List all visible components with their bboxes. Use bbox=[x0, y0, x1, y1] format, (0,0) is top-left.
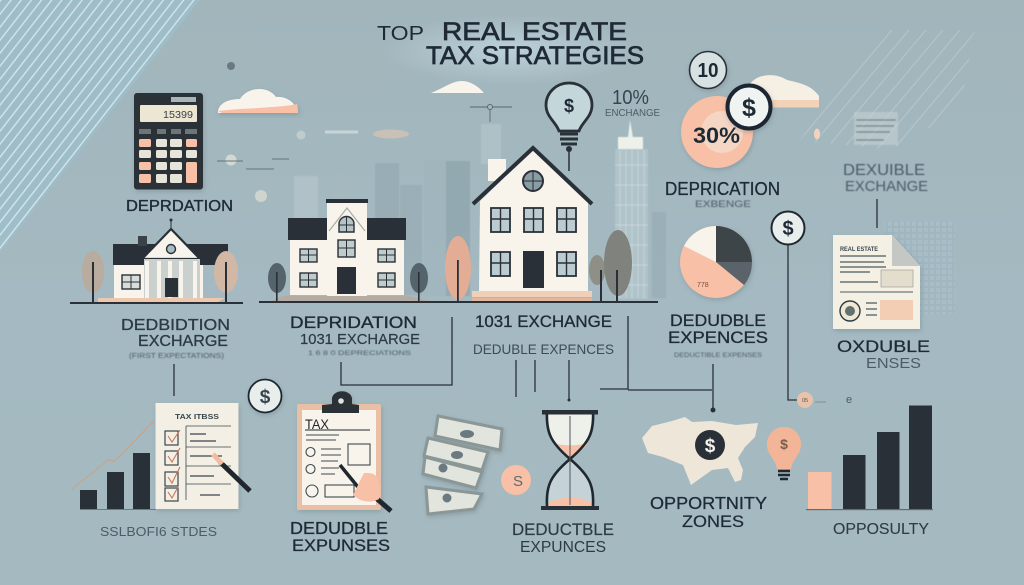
label: deductble expunces bbox=[512, 520, 614, 556]
label: dedudble expences: DEDUDBLE bbox=[670, 312, 766, 330]
label: dedudble expences: DEDUCTIBLE EXPENSES bbox=[674, 352, 763, 359]
icon: 10 coin bbox=[690, 52, 726, 88]
icon: dollar coin with post bbox=[772, 212, 804, 400]
map: $ bbox=[705, 436, 716, 457]
label: opposulty: OPPOSULTY bbox=[833, 521, 929, 538]
skyscraper bbox=[615, 120, 648, 299]
grid texture bbox=[885, 222, 955, 314]
peach dollar coin: S bbox=[513, 473, 523, 490]
bar chart with trend bbox=[72, 421, 156, 510]
icon: hourglass bbox=[541, 410, 599, 510]
label: 10% exchange: 10% bbox=[612, 87, 649, 109]
label: deductble expunces: DEDUCTBLE bbox=[512, 520, 614, 539]
icon: 30% circle: 30% bbox=[693, 123, 740, 148]
label: deductble expunces: EXPUNCES bbox=[520, 539, 606, 556]
ground line 2 bbox=[259, 301, 658, 303]
label: deprication bbox=[665, 179, 780, 210]
faded small document bbox=[854, 112, 898, 145]
label: dedudble expences bbox=[668, 312, 768, 359]
label: dedudble expenses: EXPUNSES bbox=[292, 536, 390, 555]
label: oxdubable expenses bbox=[837, 337, 930, 372]
title: TAX STRATEGIES bbox=[426, 42, 644, 70]
label: dexuible exchange: DEXUIBLE bbox=[843, 162, 925, 179]
bar chart bbox=[806, 406, 933, 510]
label: depridation 1031 exchange: DEPRIDATION bbox=[290, 314, 417, 332]
clipboard bbox=[297, 391, 381, 510]
icon: peach lightbulb: $ bbox=[780, 436, 788, 452]
building 1 bbox=[82, 218, 238, 302]
map bbox=[642, 417, 758, 485]
label: dedudble expenses: DEDUDBLE bbox=[290, 518, 388, 538]
icon: dollar coin: $ bbox=[260, 387, 271, 408]
icon: dollar coin with post: $ bbox=[782, 218, 794, 240]
small peach coin: 05 bbox=[802, 398, 808, 404]
pie chart bbox=[680, 226, 752, 298]
label: depridation 1031 exchange: 1 6 8 0 DEPRECIATIONS bbox=[308, 350, 412, 357]
title: TOP bbox=[377, 23, 424, 45]
small peach coin: e bbox=[846, 394, 852, 406]
label: deprication: EXBENGE bbox=[695, 199, 751, 210]
label: dexuible exchange bbox=[843, 162, 928, 195]
label: dedudble expences: EXPENCES bbox=[668, 329, 768, 347]
title: REAL ESTATE bbox=[442, 18, 627, 46]
label: sslbdfi6 stdes: SSLBOFI6 STDES bbox=[100, 524, 217, 539]
icon: calculator: 15399 bbox=[163, 110, 193, 121]
label: 10% exchange bbox=[605, 87, 660, 119]
cloud left bbox=[218, 89, 298, 113]
icon: hand with pen bbox=[340, 465, 391, 511]
document: real estate: REAL ESTATE bbox=[840, 246, 879, 253]
icon: dollar coin bbox=[728, 86, 770, 128]
main house bbox=[472, 148, 592, 297]
icon: 10 coin: 10 bbox=[698, 60, 718, 82]
title bbox=[377, 18, 644, 70]
small drop bbox=[814, 128, 820, 140]
checklist document: TAX ITBSS bbox=[175, 412, 219, 421]
icon: 30% circle bbox=[681, 96, 753, 168]
document: real estate bbox=[833, 235, 920, 329]
label: dedbidtion exchange: EXCHARGE bbox=[138, 333, 228, 350]
cloud centre bbox=[431, 81, 484, 93]
peach dollar coin bbox=[501, 465, 531, 495]
icon: pen bbox=[213, 454, 250, 491]
cloud right bbox=[750, 75, 819, 108]
label: deprication: DEPRICATION bbox=[665, 179, 780, 199]
clipboard: TAX bbox=[305, 416, 330, 432]
label: oxdubable expenses: ENSES bbox=[866, 356, 921, 372]
label: 1031 exchange: 1031 EXCHANGE bbox=[475, 312, 612, 331]
icon: dollar coin bbox=[248, 380, 282, 412]
icon: dollar coin: $ bbox=[742, 94, 756, 122]
label: dedudble expenses bbox=[290, 518, 390, 555]
icon: lightbulb: $ bbox=[564, 96, 574, 116]
checklist document bbox=[156, 403, 238, 509]
city skyline background bbox=[294, 124, 666, 298]
label: oxdubable expenses: OXDUBLE bbox=[837, 337, 930, 356]
icon: money stacks bbox=[423, 416, 502, 514]
label: deduble expences: DEDUBLE EXPENCES bbox=[473, 341, 614, 357]
label: dedbidtion exchange bbox=[121, 317, 230, 360]
label: dexuible exchange: EXCHANGE bbox=[845, 178, 928, 195]
small peach coin bbox=[797, 392, 852, 408]
building 2 bbox=[268, 199, 430, 302]
label: opportunity zones: OPPORTNITY bbox=[650, 493, 767, 513]
arrow bbox=[876, 199, 878, 228]
label: 10% exchange: ENCHANGE bbox=[605, 107, 660, 119]
label: dedbidtion exchange: (FIRST EXPECTATIONS) bbox=[129, 351, 225, 360]
ground line 1 bbox=[70, 302, 243, 304]
label: opportunity zones: ZONES bbox=[682, 513, 744, 531]
label: depridation 1031 exchange: 1031 EXCHARGE bbox=[300, 331, 420, 348]
trees beside main house bbox=[445, 230, 632, 302]
small decorative coins bbox=[217, 62, 512, 202]
icon: lightbulb bbox=[546, 83, 592, 171]
connectors bbox=[174, 316, 713, 408]
label: deprdation: DEPRDATION bbox=[126, 198, 233, 215]
icon: peach lightbulb bbox=[767, 427, 801, 479]
label: opportunity zones bbox=[650, 493, 767, 531]
label: depridation 1031 exchange bbox=[290, 314, 420, 357]
pie chart: 778 bbox=[697, 282, 709, 289]
icon: calculator bbox=[134, 93, 203, 190]
label: dedbidtion exchange: DEDBIDTION bbox=[121, 317, 230, 334]
